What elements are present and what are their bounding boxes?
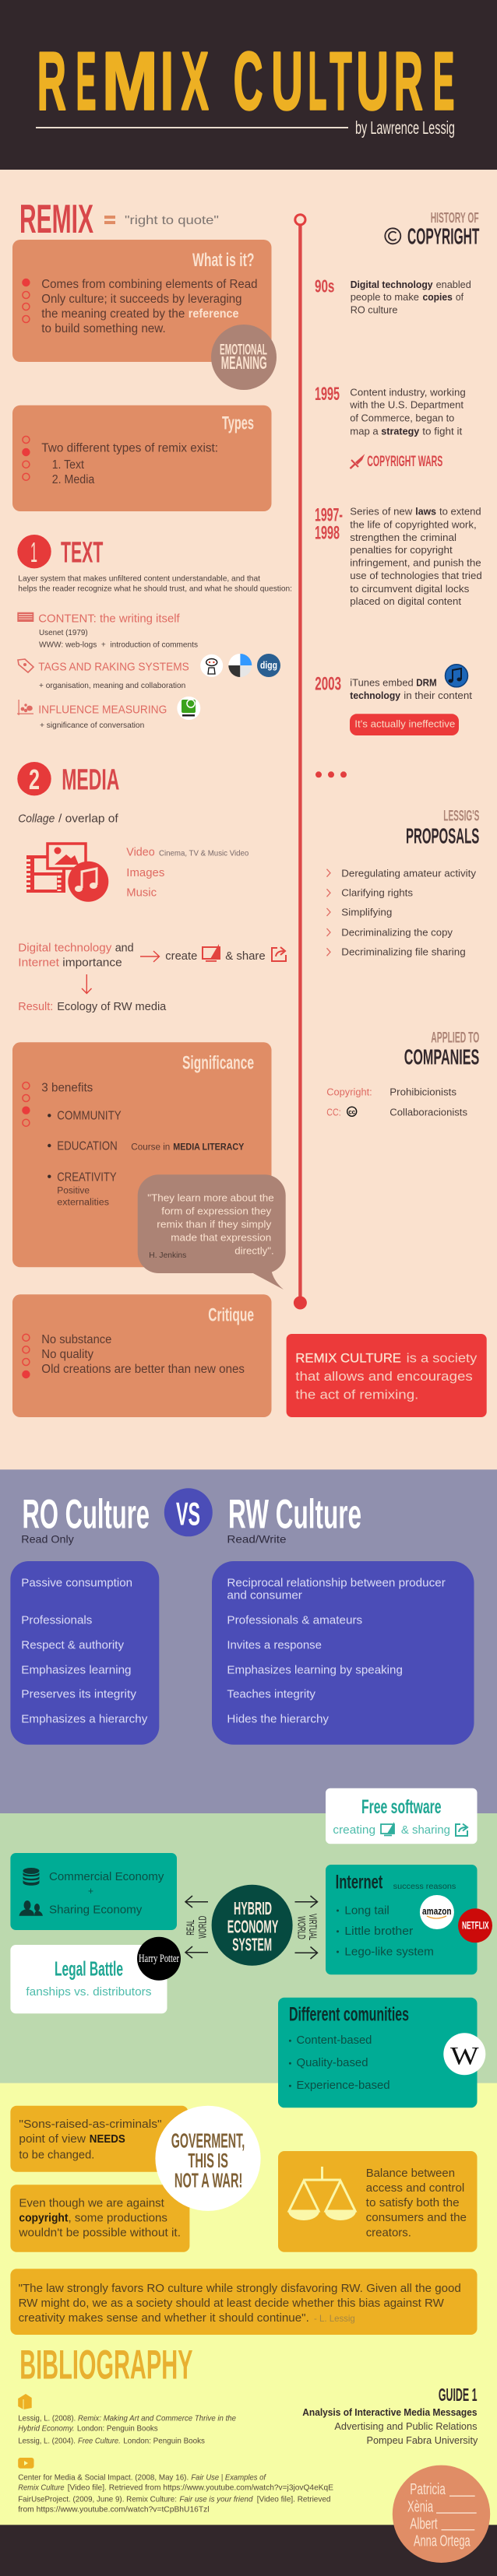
panel: significance: 3 benefits [41, 1081, 93, 1094]
callout: ineffective [350, 714, 459, 735]
influence item: + significance of conversation [40, 721, 144, 730]
companies list: CC: [326, 1106, 341, 1118]
proposals list: Simplifying [341, 907, 392, 918]
text description: helps the reader recognize what he should trust, and what he should question: [18, 584, 292, 593]
badge: authors: Albert [410, 2515, 438, 2532]
icon: itunes [446, 665, 467, 687]
label: virtual world [296, 1914, 319, 1940]
panel: different communities: Quality-based [296, 2056, 368, 2069]
header band: E [433, 36, 455, 128]
timeline entry: 90s: RO culture [351, 304, 397, 316]
panel: RW list: Teaches integrity [227, 1688, 316, 1701]
icon: wikipedia [443, 2033, 485, 2075]
icon: netflix [458, 1908, 492, 1943]
icon: people [19, 1900, 43, 1916]
heading: media: MEDIA [62, 763, 119, 796]
continuation dots [315, 771, 347, 777]
speech bubble: Jenkins quote: H. Jenkins [149, 1251, 186, 1260]
video references: Fair Use | Examples of [191, 2473, 266, 2483]
speech bubble: Jenkins quote: form of expression they [161, 1205, 272, 1216]
panel: RW list: Hides the hierarchy [227, 1713, 329, 1726]
panel: RO list: Preserves its integrity [21, 1688, 137, 1701]
icon: sword [351, 454, 365, 469]
content item: WWW: web-logs + introduction of comments [39, 640, 198, 649]
hybrid economy system hub: ECONOMY [227, 1916, 278, 1936]
icon: books [18, 2394, 32, 2409]
title: R [394, 36, 423, 128]
timeline entry: 2003: iTunes embed [350, 677, 414, 689]
media list: Images [126, 866, 164, 879]
callout: government this is not a war [155, 2106, 261, 2211]
timeline entry: 2003: technology [350, 690, 401, 701]
timeline entry: 1997-1998: to circumvent digital locks [350, 583, 470, 595]
arrows: real world [185, 1896, 208, 1958]
panel: RO list: Respect & authority [21, 1639, 124, 1652]
panel: even though: , some productions [69, 2211, 167, 2224]
text description: Layer system that makes unfiltered content understandable, and that [18, 574, 260, 584]
media intro [18, 812, 119, 826]
icon: film photo music [26, 844, 108, 902]
icon: amazon [420, 1895, 454, 1929]
panel: even though [10, 2185, 189, 2252]
tags item: TAGS AND RAKING SYSTEMS [38, 660, 189, 673]
media list: Cinema, TV & Music Video [159, 848, 248, 858]
timeline entry: 90s [315, 276, 471, 316]
panel: different communities [278, 1998, 477, 2107]
panel: Lessig quote [10, 2269, 477, 2335]
icon: keyboard [17, 612, 33, 622]
badge: authors: Xènia [407, 2498, 434, 2515]
heading: text: TEXT [61, 536, 103, 569]
title [37, 36, 455, 128]
panel: balance: access and control [366, 2181, 464, 2195]
panel: what is it: the meaning created by the [41, 307, 185, 321]
timeline entry: 1995: with the U.S. Department [349, 398, 464, 410]
heading: RW culture: Read/Write [227, 1533, 287, 1546]
video references: from https://www.youtube.com/watch?v=tCpBhU16Tzl [18, 2505, 210, 2515]
panel: balance: creators. [366, 2226, 411, 2239]
panel: internet: Long tail [344, 1904, 389, 1917]
icon: amazon: amazon [422, 1905, 452, 1917]
timeline entry: 1997-1998: 1998 [315, 523, 340, 544]
speech bubble: Jenkins quote [138, 1174, 286, 1290]
panel: significance: externalities [57, 1198, 109, 1207]
icon: harry potter: Harry Potter [139, 1953, 179, 1965]
panel: commercial and sharing economy [10, 1853, 177, 1930]
panel: internet: Lego-like system [344, 1945, 434, 1958]
header band [0, 0, 497, 170]
panel: sons raised as criminals: NEEDS [90, 2132, 125, 2146]
video references: [Video file]. Retrieved [257, 2495, 331, 2504]
panel: RO list [10, 1561, 159, 1745]
panel: balance: Balance between [366, 2167, 455, 2180]
panel: RO list: Emphasizes a hierarchy [21, 1713, 148, 1726]
panel: RW list: Emphasizes learning by speaking [227, 1664, 403, 1677]
video references: Fair use is your friend [179, 2495, 253, 2504]
media list: Music [126, 886, 157, 900]
panel: different communities: Experience-based [296, 2079, 390, 2092]
speech bubble: Jenkins quote: remix than if they simply [157, 1218, 272, 1230]
icon: delicious [228, 654, 252, 677]
panel: sons raised as criminals: "Sons-raised-as-criminals" [19, 2118, 162, 2131]
panel: even though: copyright [19, 2211, 68, 2224]
panel: critique: Old creations are better than new ones [41, 1363, 245, 1376]
panel: what is it: reference [189, 307, 239, 321]
panel: what is it: Only culture; it succeeds by leveraging [41, 293, 242, 306]
panel: types: 1. Text [52, 458, 85, 472]
section: text [17, 535, 292, 730]
panel: RW list: Professionals & amateurs [227, 1614, 362, 1627]
vs badge: VS [176, 1495, 200, 1532]
timeline entry: 1997-1998 [315, 504, 482, 607]
timeline entry: 1997-1998: Series of new [350, 506, 413, 518]
companies list: cc [348, 1107, 355, 1115]
panel: critique: No substance [41, 1333, 111, 1346]
arrow: down to result [82, 974, 92, 993]
create and share [165, 944, 286, 963]
heading: RO culture [21, 1491, 150, 1546]
icon: scales [288, 2167, 356, 2220]
panel: internet [326, 1865, 477, 1974]
panel: Lessig quote: "The law strongly favors RO culture while strongly disfavoring RW. Given all the good [19, 2282, 461, 2295]
timeline entry: 1995: map a [350, 425, 379, 437]
panel: internet: success reasons [393, 1882, 456, 1891]
video references: Remix Culture [18, 2483, 65, 2493]
panel: significance: Positive [57, 1186, 90, 1195]
panel: Lessig quote: - L. Lessig [314, 2313, 355, 2324]
heading: RO culture: RO Culture [22, 1491, 150, 1537]
timeline entry: 2003: in their content [404, 690, 472, 701]
panel: significance: COMMUNITY [57, 1109, 122, 1122]
icon: harry potter [137, 1937, 181, 1981]
timeline entry: 2003 [315, 674, 472, 701]
video references: Center for Media & Social Impact. (2008, May 16). [18, 2473, 189, 2483]
panel: significance: Course in [131, 1142, 170, 1152]
timeline entry: 1995: of Commerce, began to [350, 412, 454, 423]
panel: remix culture definition: the act of remixing. [295, 1387, 418, 1402]
panel: types: Types [222, 413, 254, 434]
label: virtual world: VIRTUAL [307, 1914, 319, 1940]
panel: RW list: Reciprocal relationship between producer [227, 1577, 446, 1590]
panel: remix culture definition [287, 1334, 487, 1417]
label: real world [184, 1916, 209, 1939]
timeline entry: 90s: Digital technology [351, 279, 433, 290]
section: RO vs RW [0, 1469, 497, 1813]
create and share: create [165, 949, 197, 963]
heading: bibliography: BIBLIOGRAPHY [19, 2343, 193, 2388]
timeline entry: 1997-1998: laws [415, 506, 436, 518]
content item: CONTENT: the writing itself [38, 612, 181, 625]
panel: what is it [12, 240, 271, 362]
arrows: virtual world [294, 1896, 318, 1959]
books references [18, 2414, 236, 2446]
panel: RO list: Professionals [21, 1614, 92, 1627]
media intro: Collage [18, 812, 55, 826]
badge: authors [393, 2465, 490, 2563]
companies list: Copyright: [326, 1086, 372, 1097]
timeline entry: 90s: people to make [351, 291, 419, 303]
digital technology text: Internet [18, 956, 60, 970]
section backgrounds: hybrid economy and government [0, 1813, 497, 2525]
timeline entry: 1997-1998: the life of copyrighted work, [350, 518, 477, 530]
icon: tag [18, 659, 33, 672]
panel: commercial and sharing economy: Commercial Economy [49, 1870, 164, 1883]
books references: Lessig, L. (2008). [18, 2414, 76, 2423]
footer band [0, 2525, 497, 2576]
influence item: INFLUENCE MEASURING [38, 704, 167, 717]
panel: Lessig quote: RW might do, we as a society should at least decide whether this bias against RW [19, 2297, 445, 2310]
heading: RW culture [227, 1491, 361, 1546]
arrow: to create [140, 951, 159, 962]
books references: Hybrid Economy. [18, 2424, 75, 2434]
panel: free software [326, 1788, 477, 1844]
speech bubble: Jenkins quote: "They learn more about the [147, 1191, 274, 1203]
panel: RW list: Invites a response [227, 1639, 322, 1652]
panel: types: 2. Media [52, 473, 95, 486]
section: media [17, 762, 286, 1013]
panel: remix culture definition: REMIX CULTURE [295, 1351, 401, 1366]
panel: significance [12, 1042, 271, 1267]
callout: government this is not a war: THIS IS [188, 2150, 228, 2172]
panel: free software: Free software [361, 1796, 442, 1818]
label: virtual world: WORLD [296, 1916, 308, 1939]
panel: RW list: and consumer [227, 1589, 302, 1602]
number badge 2 [17, 762, 51, 795]
panel: internet: Internet [336, 1872, 383, 1893]
title: M [102, 36, 158, 128]
icon: digg [257, 654, 280, 677]
heading: RW culture: RW Culture [228, 1491, 361, 1537]
timeline entry: 1995: to fight it [422, 425, 463, 437]
timeline entry: 1997-1998: penalties for copyright [350, 544, 453, 556]
content item [38, 612, 198, 649]
content item: Usenet (1979) [39, 628, 88, 637]
books references: Lessig, L. (2004). [18, 2437, 76, 2446]
panel: what is it: to build something new. [41, 322, 166, 335]
influence item [38, 704, 167, 730]
tags item: + organisation, meaning and collaboration [39, 681, 185, 690]
panel: types [12, 405, 271, 511]
course credits: Analysis of Interactive Media Messages [302, 2406, 477, 2418]
hybrid economy system hub: SYSTEM [232, 1935, 272, 1955]
timeline line [294, 215, 307, 1310]
icon: reddit [200, 655, 223, 677]
digital technology text: importance [62, 956, 122, 970]
panel: free software: & sharing [401, 1823, 450, 1837]
timeline entry: 1995: strategy [381, 425, 420, 437]
timeline entry: 1997-1998: to extend [439, 506, 481, 518]
timeline entry: 1995 [315, 384, 466, 437]
number badge 2: 2 [29, 763, 40, 795]
panel: Lessig quote: creativity makes sense and whether it should continue". [19, 2311, 309, 2325]
digital technology text [18, 941, 134, 970]
callout: emotional meaning: MEANING [221, 353, 267, 373]
heading: Lessig's proposals [406, 809, 479, 848]
heading: remix equals right to quote [19, 197, 219, 242]
books references: Remix: Making Art and Commerce Thrive in the [78, 2414, 236, 2423]
callout: government this is not a war: NOT A WAR! [174, 2171, 242, 2192]
video references: FairUseProject. (2009, June 9). Remix Culture: [18, 2495, 177, 2504]
tags item [38, 660, 189, 690]
number badge 1 [17, 535, 51, 568]
callout: emotional meaning [211, 325, 277, 390]
panel: significance: Significance [182, 1052, 254, 1073]
vs badge [164, 1488, 213, 1536]
media list [126, 845, 248, 900]
timeline entry: 1997-1998: 1997- [315, 504, 343, 525]
media list: Video [126, 845, 155, 858]
panel: what is it: What is it? [192, 250, 254, 271]
callout: emotional meaning: EMOTIONAL [220, 342, 267, 359]
panel: different communities: Different comunities [289, 2004, 409, 2026]
title: X [182, 36, 209, 128]
panel: critique [12, 1294, 271, 1417]
digital technology text: Digital technology [18, 941, 112, 954]
books references: Free Culture. [78, 2437, 121, 2446]
panel: balance: consumers and the [366, 2211, 467, 2224]
title: I [160, 36, 174, 128]
title: L [308, 36, 327, 128]
result line: Ecology of RW media [57, 1000, 167, 1013]
panel: sons raised as criminals: point of view [19, 2132, 86, 2146]
course credits: Pompeu Fabra University [366, 2434, 478, 2446]
panel: balance: to satisfy both the [366, 2196, 460, 2209]
panel: remix culture definition: is a society [407, 1351, 478, 1366]
companies list: Prohibicionists [389, 1086, 456, 1097]
heading: remix equals right to quote: REMIX [19, 197, 93, 242]
books references: London: Penguin Books [77, 2424, 158, 2434]
proposals list: Clarifying rights [341, 887, 414, 899]
panel: critique: No quality [41, 1348, 93, 1361]
timeline entry: 90s: of [456, 291, 464, 303]
timeline entry: 90s: 90s [315, 276, 334, 297]
timeline entry: 2003: DRM [416, 677, 437, 689]
proposals list: Decriminalizing the copy [341, 927, 453, 939]
timeline entry: 1995: Content industry, working [350, 386, 466, 398]
panel: significance: CREATIVITY [57, 1170, 117, 1184]
panel: internet: Little brother [344, 1925, 413, 1938]
title: E [76, 36, 97, 128]
icon: influence chart [17, 700, 33, 715]
heading: history of copyright [385, 209, 480, 249]
label: real world: REAL [184, 1920, 196, 1936]
panel: remix culture definition: that allows and encourages [295, 1369, 473, 1384]
panel: even though: wouldn't be possible without it. [18, 2226, 181, 2239]
panel: significance: MEDIA LITERACY [173, 1142, 245, 1152]
heading: RO culture: Read Only [21, 1533, 74, 1546]
panel: legal battle: fanships vs. distributors [26, 1985, 152, 1999]
hybrid economy system hub [212, 1885, 293, 1966]
panel: RO list: Emphasizes learning [21, 1664, 131, 1677]
companies list: Collaboracionists [389, 1106, 467, 1118]
heading: applied to companies [404, 1030, 479, 1069]
timeline entry: 2003: 2003 [315, 674, 341, 695]
speech bubble: Jenkins quote: directly". [234, 1244, 274, 1256]
timeline entry: 1995: 1995 [315, 384, 340, 405]
books references: London: Penguin Books [123, 2437, 205, 2446]
panel: what is it: Comes from combining elements of Read [41, 278, 258, 291]
course credits [302, 2385, 478, 2446]
icon: wikipedia: W [450, 2043, 480, 2071]
panel: commercial and sharing economy: + [88, 1885, 93, 1897]
panel: sons raised as criminals [10, 2106, 188, 2172]
speech bubble: Jenkins quote: made that expression [171, 1231, 271, 1243]
panel: types: Two different types of remix exist: [41, 442, 218, 455]
panel: RW list [212, 1561, 474, 1745]
proposals list: Deregulating amateur activity [341, 868, 477, 879]
icon: digg: digg [260, 659, 277, 671]
panel: different communities: Content-based [296, 2034, 372, 2047]
timeline entry: 1997-1998: use of technologies that tried [350, 570, 482, 581]
panel: significance: EDUCATION [57, 1140, 118, 1153]
timeline entry: 90s: enabled [436, 279, 471, 290]
companies list [326, 1086, 467, 1118]
course credits: Advertising and Public Relations [334, 2420, 478, 2432]
title: U [271, 36, 303, 128]
number badge 1: 1 [30, 536, 37, 568]
icon: coins [23, 1868, 39, 1886]
title: U [356, 36, 389, 128]
panel: free software: creating [333, 1823, 375, 1837]
timeline entry: 90s: copies [422, 291, 453, 303]
proposals list [327, 868, 477, 958]
icon: technorati [177, 697, 200, 720]
hybrid economy system hub: HYBRID [234, 1898, 272, 1918]
panel: balance [278, 2151, 477, 2252]
heading: remix equals right to quote: "right to quote" [125, 214, 219, 227]
digital technology text: and [115, 941, 134, 954]
callout: government this is not a war: GOVERMENT, [171, 2130, 245, 2152]
media intro: / overlap of [58, 812, 119, 826]
panel: legal battle [10, 1945, 167, 2013]
icon: monitor [381, 1822, 394, 1836]
timeline entry: 1997-1998: placed on digital content [350, 595, 461, 607]
result line: Result: [18, 1000, 53, 1013]
label: real world: WORLD [196, 1916, 209, 1939]
panel: legal battle: Legal Battle [55, 1957, 123, 1980]
panel: RO list: Passive consumption [21, 1577, 132, 1590]
timeline entry: 1997-1998: strengthen the criminal [350, 532, 456, 543]
callout: ineffective: It's actually ineffective [354, 718, 455, 729]
proposals list: Decriminalizing file sharing [341, 946, 466, 958]
title: R [37, 36, 66, 128]
panel: critique: Critique [208, 1304, 254, 1325]
title: T [330, 36, 352, 128]
timeline entry: 1997-1998: infringement, and punish the [350, 557, 481, 569]
icon: share [456, 1824, 467, 1836]
panel: commercial and sharing economy: Sharing Economy [49, 1903, 143, 1916]
badge: authors: Patricia [410, 2481, 446, 2498]
icon: video play [18, 2458, 34, 2469]
panel: even though: Even though we are against [19, 2196, 165, 2209]
text description [18, 574, 292, 593]
video references: [Video file]. Retrieved from https://www.youtube.com/watch?v=j3jovQ4eKqE [68, 2483, 333, 2493]
panel: sons raised as criminals: to be changed. [19, 2148, 94, 2161]
title: C [234, 36, 263, 128]
create and share: & share [225, 949, 266, 963]
video references [18, 2473, 333, 2515]
